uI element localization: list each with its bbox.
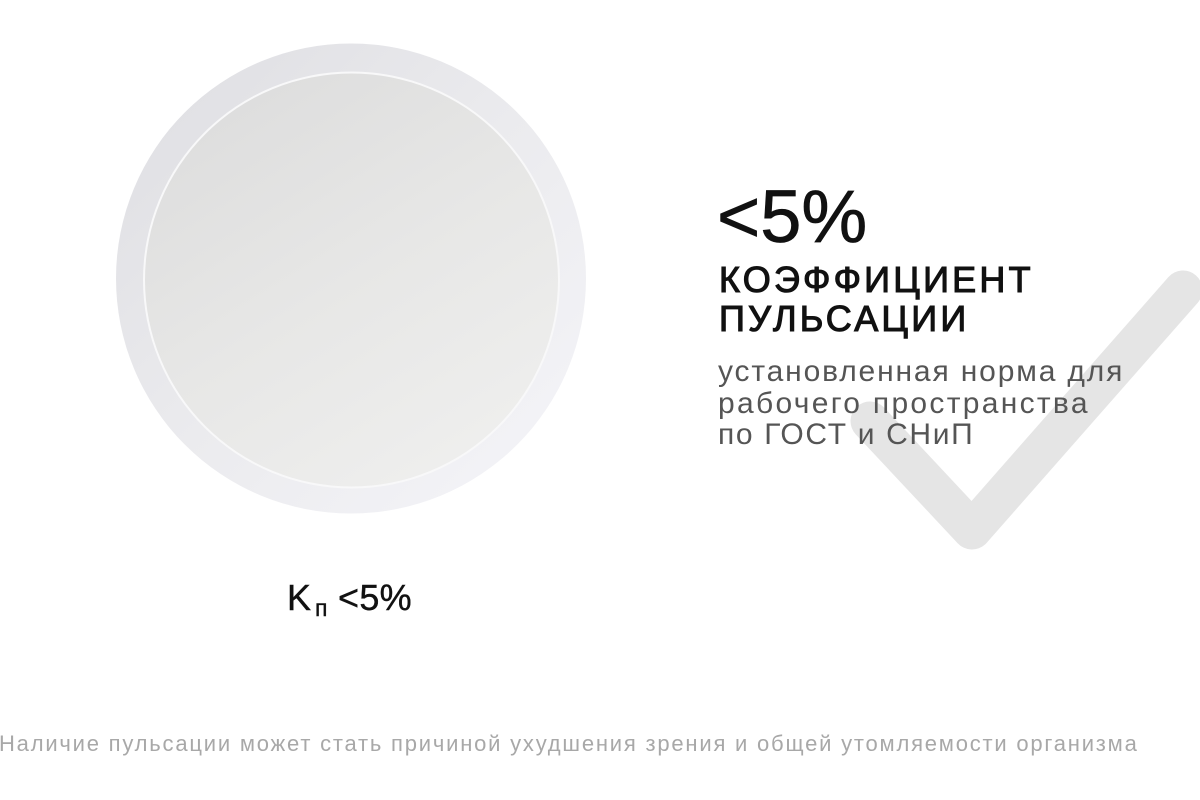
text block: norm description: рабочего пространства <box>718 386 1090 420</box>
label: Kp value: <5% <box>338 577 412 618</box>
label: Kp value: п <box>315 595 327 621</box>
heading: value: <5% <box>717 175 867 258</box>
heading: pulsation coefficient: КОЭФФИЦИЕНТ <box>719 259 1034 300</box>
text block: norm description: по ГОСТ и СНиП <box>718 418 974 451</box>
heading: pulsation coefficient <box>719 259 1034 339</box>
label: Kp value: K <box>287 577 311 618</box>
heading: pulsation coefficient: ПУЛЬСАЦИИ <box>719 298 969 338</box>
text block: norm description <box>718 355 1124 451</box>
label: Kp value <box>287 577 412 621</box>
footnote: Наличие пульсации может стать причиной ухудшения зрения и общей утомляемости организма <box>0 731 1139 756</box>
text block: norm description: установленная норма для <box>718 355 1124 388</box>
product: round LED panel <box>116 44 586 514</box>
